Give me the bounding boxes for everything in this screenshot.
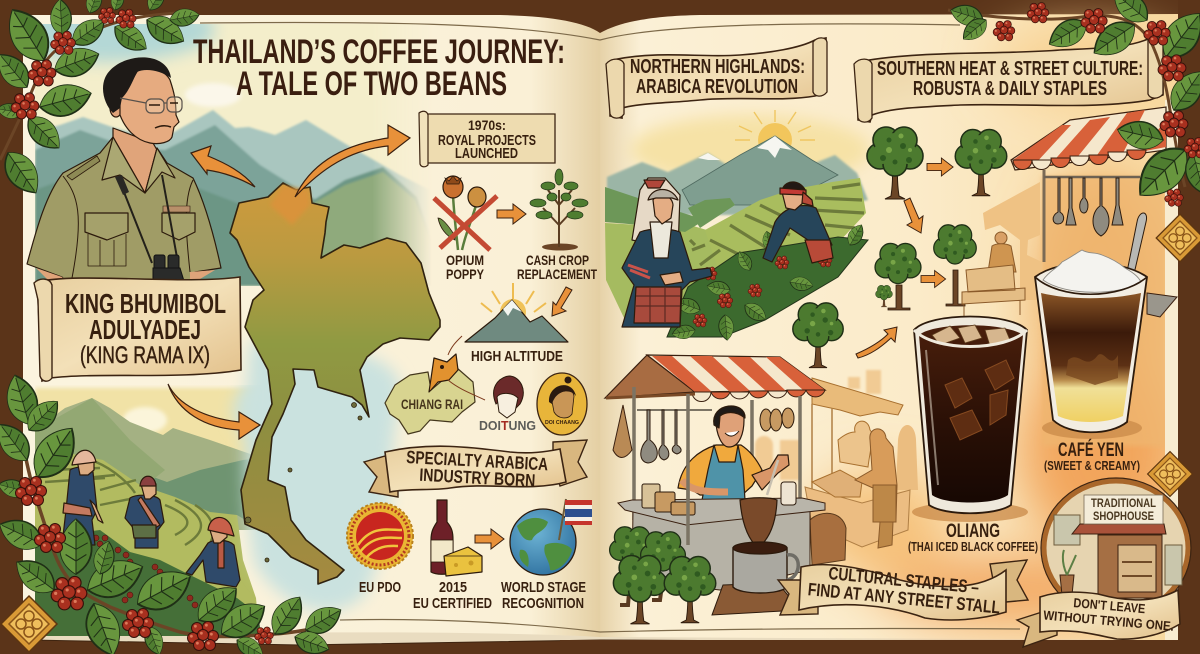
coffee branch bottom left <box>0 372 346 654</box>
tails <box>778 560 1028 615</box>
leaves <box>948 1 986 29</box>
band <box>1040 590 1180 639</box>
caption: ROYAL PROJECTS <box>438 132 536 149</box>
heading text: ROBUSTA & DAILY STAPLES <box>913 78 1107 100</box>
glass highlight <box>926 350 938 485</box>
label: EU PDO: EU PDO <box>359 579 401 596</box>
milk swirl <box>1066 354 1118 385</box>
left bottom harvest scene <box>35 385 260 636</box>
Akha woman <box>622 178 712 327</box>
label: oliang <box>908 521 1038 554</box>
label: world stage recognition: WORLD STAGE <box>501 579 586 596</box>
grey counter behind <box>1147 293 1177 317</box>
scroll roll <box>34 279 52 381</box>
scroll: 1970s royal projects <box>419 111 555 167</box>
awning scallops <box>1013 150 1146 170</box>
background market scene <box>755 370 918 565</box>
ornament right upper <box>1156 214 1200 262</box>
right collar <box>145 148 175 193</box>
caption: TRADITIONAL <box>1091 496 1156 510</box>
left page <box>23 15 600 637</box>
left field <box>605 223 740 330</box>
label: cash crop replacement: REPLACEMENT <box>517 266 597 282</box>
headscarf <box>208 517 234 536</box>
ornament bottom left <box>1 596 57 652</box>
terraced slopes <box>705 178 866 275</box>
text <box>1043 593 1176 634</box>
text: CULTURAL STAPLES – <box>828 563 980 597</box>
shirt <box>678 445 762 495</box>
apron <box>702 445 745 500</box>
shadow <box>912 502 1028 522</box>
sky <box>35 24 428 170</box>
forearm skin <box>36 268 215 282</box>
strap pad <box>115 175 129 195</box>
shophouse medallion <box>1041 478 1191 618</box>
right page <box>600 14 1178 640</box>
street stall <box>605 355 825 615</box>
sash <box>218 541 224 568</box>
face <box>120 68 179 144</box>
left slope shade <box>35 398 165 490</box>
glass rim front <box>1035 277 1147 294</box>
counter body <box>632 505 810 590</box>
banner tails <box>364 440 587 497</box>
banner: southern heat <box>854 37 1163 122</box>
plant pot <box>1060 575 1074 595</box>
arrow: king to southern map <box>168 384 260 439</box>
drink <box>1041 293 1141 422</box>
headdress red <box>644 180 665 188</box>
glass <box>914 316 1027 513</box>
forest centre <box>688 198 735 228</box>
sleeve stripes <box>628 265 650 278</box>
scroll: king name: ADULYADEJ <box>89 314 201 345</box>
label: opium poppy: OPIUM <box>446 252 484 268</box>
necklace <box>650 222 672 258</box>
far mountains <box>607 136 868 215</box>
scroll: king name: (KING RAMA IX) <box>80 342 210 369</box>
title: A TALE OF TWO BEANS <box>236 65 507 103</box>
label: cafe yen: CAFÉ YEN <box>1058 439 1124 461</box>
counter top <box>618 498 825 525</box>
right page edge repair <box>560 0 1200 654</box>
green ridge <box>154 460 249 519</box>
awning scallops <box>692 390 825 402</box>
caption <box>438 117 536 162</box>
headscarf <box>72 450 96 465</box>
glass rim front <box>914 330 1027 346</box>
basket <box>132 525 156 538</box>
face <box>141 484 156 499</box>
branch stem <box>23 444 306 637</box>
arrow: crop to altitude <box>552 287 572 316</box>
utensil rail <box>1044 176 1140 178</box>
aqua sky glow <box>40 24 222 70</box>
shelves <box>1122 562 1152 576</box>
page stack edge <box>30 628 1178 645</box>
branch stem <box>0 13 176 160</box>
coffee bush band <box>667 237 868 337</box>
arrow: map to king <box>191 146 255 187</box>
coffee table <box>712 583 800 615</box>
banner: specialty arabica industry born <box>364 440 587 497</box>
arrow <box>927 158 953 176</box>
icon: wine bottle and cheese <box>431 500 482 576</box>
scroll paper <box>36 277 241 381</box>
shrub berries <box>93 535 198 608</box>
tiny cart <box>962 265 1025 317</box>
sun rays <box>735 110 815 140</box>
ornament right lower <box>1148 452 1192 496</box>
text: DON'T LEAVE <box>1073 595 1146 616</box>
arrow: certified to world <box>475 529 504 549</box>
market vendor <box>838 421 872 467</box>
sky blue corner <box>226 385 254 434</box>
curved arrow <box>856 327 897 358</box>
market tent <box>812 378 903 416</box>
map: northern highlight <box>270 186 310 225</box>
logo: Doi Chaang <box>537 373 587 435</box>
frame outline <box>1041 478 1191 618</box>
ice foam <box>1043 250 1141 292</box>
label: cash crop replacement: CASH CROP <box>526 252 589 268</box>
label: oliang: OLIANG <box>946 521 1000 542</box>
worker one <box>62 450 103 545</box>
caption: 1970s: <box>468 117 506 133</box>
arrow: poppy to crop <box>497 204 526 224</box>
face <box>210 531 228 544</box>
label: 2015 EU certified: 2015 <box>439 579 467 596</box>
caption: LAUNCHED <box>455 145 518 162</box>
right page warm panel <box>1042 176 1166 446</box>
title <box>193 33 565 103</box>
shirt <box>27 137 221 282</box>
icon: high altitude mountain <box>465 283 568 342</box>
jacket <box>763 206 832 262</box>
coffee branch top right <box>948 0 1200 207</box>
banner: don't leave <box>1017 590 1180 647</box>
background stall top right <box>962 107 1177 317</box>
leaves <box>1 372 43 428</box>
inset map: Chiang Rai: CHIANG RAI <box>401 396 463 412</box>
king portrait <box>27 57 221 282</box>
banner band <box>385 446 566 492</box>
tall tree <box>934 225 976 306</box>
heading text <box>630 56 805 98</box>
label: opium poppy <box>446 252 485 282</box>
face <box>77 460 94 475</box>
berries <box>1027 3 1049 23</box>
sign <box>1084 495 1163 524</box>
coffee <box>919 325 1023 502</box>
jars <box>642 482 796 515</box>
hanging gourds <box>760 408 794 431</box>
cloud <box>185 83 241 107</box>
far right silhouette <box>896 425 918 490</box>
posts <box>634 387 800 545</box>
label: cafe yen: (SWEET & CREAMY) <box>1044 458 1140 473</box>
logo: Doi Tung <box>479 376 536 433</box>
awning stripes <box>1011 107 1166 170</box>
icon: crossed opium poppy <box>434 176 497 250</box>
title: THAILAND’S COFFEE JOURNEY: <box>193 33 565 71</box>
terrace lines <box>45 462 213 550</box>
skirt <box>805 240 833 263</box>
customer skirt and legs <box>873 485 896 548</box>
label: oliang: (THAI ICED BLACK COFFEE) <box>908 539 1038 554</box>
label: cash crop replacement <box>517 252 597 282</box>
shopfront <box>1098 535 1162 598</box>
worker three <box>186 517 240 587</box>
main mountain <box>682 136 838 205</box>
neck <box>113 128 157 193</box>
head band <box>780 188 806 195</box>
raised arm <box>752 455 789 490</box>
ear <box>110 99 122 117</box>
sash <box>138 497 160 528</box>
camera strap <box>118 175 178 263</box>
right pocket <box>162 213 195 240</box>
jacket <box>622 229 712 327</box>
face <box>653 195 673 224</box>
forest left <box>605 187 705 232</box>
heading text: ARABICA REVOLUTION <box>636 76 798 98</box>
dress <box>62 467 97 545</box>
coffee mug <box>733 542 798 593</box>
windows <box>1054 515 1182 585</box>
skirt <box>634 287 681 323</box>
coffee tree growth sequence <box>793 127 1007 368</box>
shadow <box>1042 417 1142 439</box>
head <box>716 408 744 447</box>
bush leaves and berries <box>671 222 867 341</box>
jacket <box>186 540 240 587</box>
skirt plaid <box>636 287 680 322</box>
label: cafe yen <box>1044 439 1140 473</box>
roof <box>1072 524 1166 534</box>
headdress veil <box>632 178 680 250</box>
hair <box>782 182 806 192</box>
logo: Doi Chaang: DOI CHAANG <box>545 420 579 426</box>
spoon <box>1127 213 1147 274</box>
awning <box>647 355 825 392</box>
terrace lines <box>690 184 864 265</box>
silhouette tent <box>983 182 1042 300</box>
brewing sock <box>740 498 777 548</box>
ice cubes top <box>932 325 1010 346</box>
post over counter <box>686 450 690 545</box>
coffee shrubs <box>35 530 262 640</box>
berries <box>16 476 46 506</box>
net bag <box>613 405 632 458</box>
banner: cultural staples <box>778 560 1028 620</box>
roof beam <box>606 394 695 398</box>
glasses <box>120 97 182 113</box>
warm sky <box>35 386 252 454</box>
terraced fields <box>35 454 257 604</box>
sun <box>758 123 792 157</box>
heading text <box>877 58 1143 100</box>
roll <box>419 111 428 167</box>
worker two <box>125 476 164 548</box>
label: opium poppy: POPPY <box>446 266 485 282</box>
awning stripes <box>652 356 825 392</box>
banner text <box>405 447 549 491</box>
band <box>799 565 1006 620</box>
caption: SHOPHOUSE <box>1093 509 1154 523</box>
glass <box>1035 263 1147 432</box>
northern highland scene <box>605 110 870 341</box>
binoculars <box>153 255 184 281</box>
rail <box>637 409 712 411</box>
text: FIND AT ANY STREET STALL <box>807 579 1001 618</box>
head band <box>648 190 678 200</box>
label: high altitude: HIGH ALTITUDE <box>471 348 563 365</box>
tree two <box>955 130 1007 196</box>
stall gable <box>605 355 695 398</box>
caption <box>1091 496 1156 523</box>
vendor <box>678 406 789 500</box>
scarf <box>802 192 813 206</box>
market customer <box>855 429 897 520</box>
text <box>807 561 1003 618</box>
label: 2015 EU certified <box>413 579 492 612</box>
inset map: Chiang Rai <box>385 336 485 434</box>
hanging utensils <box>1053 178 1123 236</box>
text: WITHOUT TRYING ONE. <box>1043 607 1175 634</box>
arm <box>90 500 103 523</box>
hair <box>103 57 171 113</box>
coffee branch top left <box>0 0 200 200</box>
drink: cafe yen <box>1035 213 1147 439</box>
arrow <box>921 270 946 288</box>
label: world stage recognition <box>501 579 586 612</box>
banner: northern highlands <box>606 38 827 118</box>
tree cluster at stall <box>610 527 716 624</box>
map: small islands <box>245 402 362 562</box>
icon: EU PDO seal <box>347 503 413 569</box>
small plant <box>876 285 892 307</box>
tail <box>1017 612 1057 647</box>
jacket <box>125 495 164 548</box>
right page warm wash <box>810 30 1180 622</box>
heading text: NORTHERN HIGHLANDS: <box>630 56 805 78</box>
left roll <box>606 59 624 118</box>
label: 2015 EU certified: EU CERTIFIED <box>413 595 492 612</box>
market table <box>805 487 910 547</box>
icon: coffee sapling <box>530 169 588 250</box>
ladles <box>641 410 681 463</box>
warm sky wash <box>630 115 870 185</box>
band <box>610 38 826 118</box>
face <box>782 192 804 210</box>
right margin strip <box>1165 100 1178 640</box>
band <box>858 37 1163 122</box>
market goods <box>812 470 862 497</box>
coffee sack <box>810 513 846 565</box>
sun glow <box>123 407 167 433</box>
sleeve seams <box>63 176 193 278</box>
leaves <box>0 1 58 69</box>
left roll <box>854 59 872 122</box>
eyes and mouth <box>149 103 178 128</box>
pale silhouettes <box>755 370 881 480</box>
banner text: INDUSTRY BORN <box>419 465 536 491</box>
arrow: north to royal projects <box>295 125 410 197</box>
drink: oliang <box>912 316 1028 522</box>
ribbon bar <box>163 206 190 212</box>
tiny vendor <box>988 232 1016 272</box>
icon: globe with Thai flag <box>510 499 592 575</box>
smile <box>725 431 739 436</box>
scroll: king name <box>34 277 241 381</box>
mountains <box>55 398 256 530</box>
hands <box>660 272 683 285</box>
waist sash <box>63 503 92 516</box>
tent post <box>812 404 832 490</box>
right roll <box>813 38 827 96</box>
arrow down <box>904 198 923 233</box>
berries <box>51 31 75 54</box>
hair <box>714 406 745 428</box>
tree one <box>867 127 923 199</box>
hat <box>140 476 156 486</box>
lower tree <box>793 303 843 368</box>
shoulder strap <box>67 156 100 180</box>
second harvester <box>763 182 833 263</box>
map of Thailand <box>230 183 440 584</box>
label: world stage recognition: RECOGNITION <box>502 595 584 612</box>
map: sea around Thailand <box>245 340 401 611</box>
banner text: SPECIALTY ARABICA <box>406 447 549 474</box>
right roll <box>1148 37 1163 98</box>
strainer handle <box>767 460 778 495</box>
king name text: KING BHUMIBOL <box>65 288 226 319</box>
logo: Doi Tung: DOITUNG <box>479 418 536 433</box>
post <box>1042 170 1046 262</box>
page curve lines <box>200 22 1020 632</box>
branch stem <box>948 10 1185 187</box>
mountains <box>35 110 432 286</box>
left pocket <box>85 213 128 266</box>
snow peaks <box>698 136 792 160</box>
tree three <box>875 243 921 310</box>
ice cubes <box>945 360 1014 440</box>
strainer arm <box>682 480 728 492</box>
paper <box>424 114 555 163</box>
left top watercolor landscape <box>35 24 428 286</box>
frame <box>1044 481 1188 615</box>
left collar <box>102 137 145 193</box>
plant <box>1063 550 1076 575</box>
